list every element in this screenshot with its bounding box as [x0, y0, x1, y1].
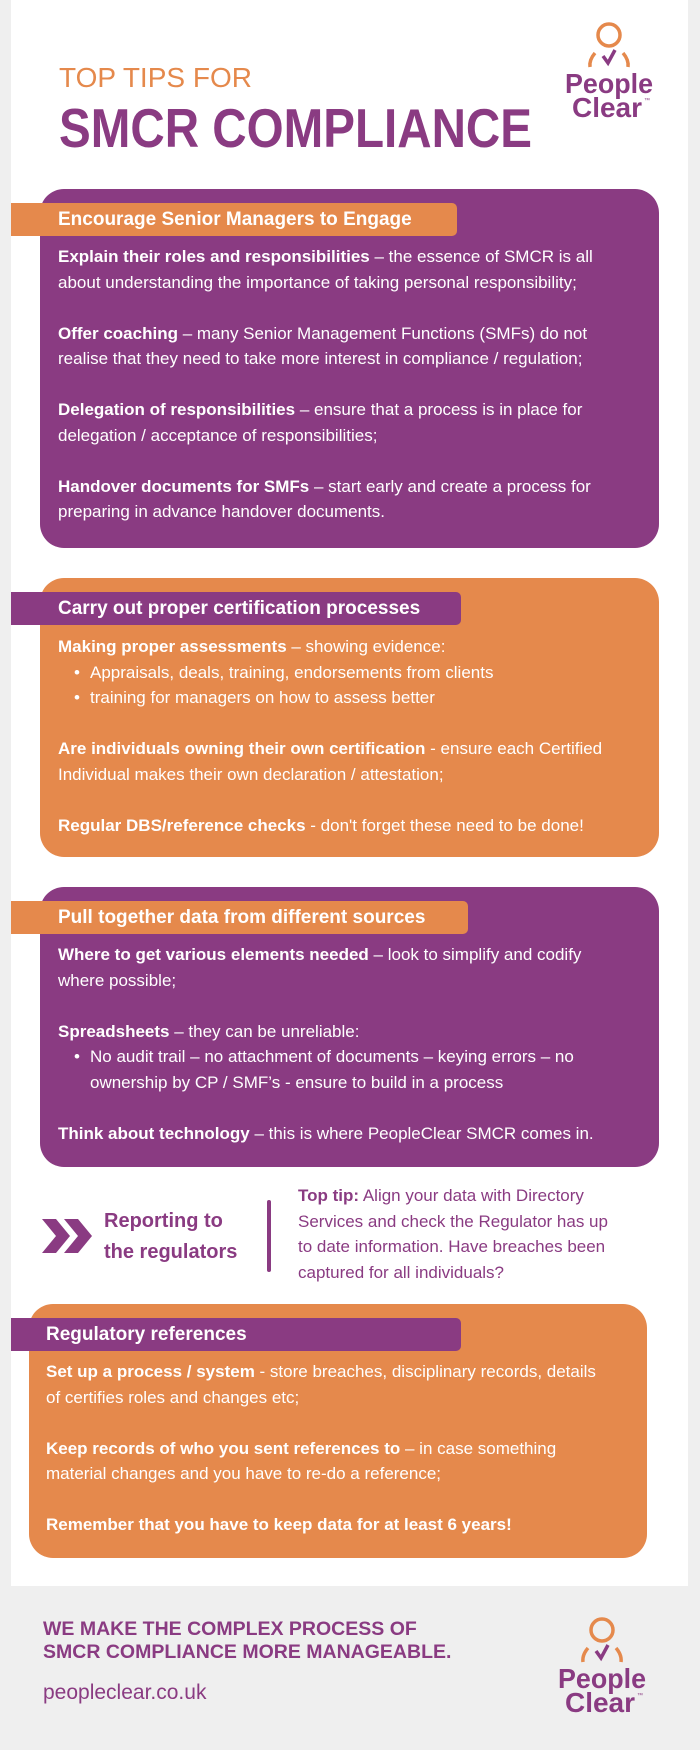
text: panel 1: realise that they need to take more interest in compliance / regulation;: [58, 349, 582, 368]
footer logo: ™: [637, 1692, 643, 1699]
text: panel 3: Spreadsheets – they can be unreliable:: [58, 1022, 359, 1040]
text: panel 1: Offer coaching – many Senior Management Functions (SMFs) do not: [58, 324, 587, 342]
panel: regulatory references: [29, 1304, 647, 1558]
text: panel 3: Think about technology – this is where PeopleClear SMCR comes in.: [58, 1124, 594, 1142]
panel: pull together data: [40, 887, 659, 1167]
callout: top tip: [298, 1186, 608, 1282]
text: panel 1: preparing in advance handover documents.: [58, 502, 385, 521]
heading bar: certification: Carry out proper certification processes: [58, 598, 420, 619]
panel: encourage senior managers: [40, 189, 659, 548]
text: panel 4: Remember that you have to keep data for at least 6 years!: [46, 1515, 512, 1534]
text: panel 2: Are individuals owning their own certification - ensure each Certified: [58, 739, 602, 758]
logo: People Clear: ™: [644, 97, 650, 104]
text: panel 1: Explain their roles and responsibilities – the essence of SMCR is all: [58, 247, 593, 266]
footer logo: People: [558, 1663, 646, 1694]
text: panel 3: ownership by CP / SMF’s - ensure to build in a process: [90, 1072, 503, 1092]
text: panel 1: about understanding the importance of taking personal responsibility;: [58, 272, 577, 292]
text: panel 2: Individual makes their own declaration / attestation;: [58, 764, 444, 784]
text: panel 3: where possible;: [58, 970, 176, 990]
text: panel 4: material changes and you have to re-do a reference;: [46, 1464, 441, 1483]
footer logo: [558, 1617, 646, 1717]
text: panel 4: of certifies roles and changes etc;: [46, 1388, 299, 1406]
text: panel 2: [58, 637, 602, 834]
text: panel 1: Handover documents for SMFs – start early and create a process for: [58, 476, 591, 496]
text: panel 3: [58, 945, 594, 1142]
text: panel 2: training for managers on how to assess better: [90, 688, 435, 707]
heading bar: certification: [11, 592, 461, 625]
heading bar: pull together data: [11, 901, 468, 934]
heading bar: encourage senior managers: [11, 203, 457, 236]
text: panel 1: Delegation of responsibilities – ensure that a process is in place for: [58, 400, 582, 419]
text: panel 2: Making proper assessments – showing evidence:: [58, 637, 445, 656]
footer: tagline: [43, 1618, 451, 1663]
heading bar: regulatory references: [11, 1318, 461, 1351]
icon: double chevron: [42, 1219, 92, 1253]
logo: People Clear: People: [565, 68, 653, 99]
heading bar: regulatory references: Regulatory references: [46, 1324, 247, 1345]
title: top tips for: TOP TIPS FOR: [59, 62, 252, 93]
footer: tagline: WE MAKE THE COMPLEX PROCESS OF: [43, 1618, 417, 1640]
footer: website: peopleclear.co.uk: [43, 1681, 206, 1704]
heading: reporting: [104, 1210, 237, 1263]
text: panel 4: [46, 1362, 596, 1534]
text: panel 1: delegation / acceptance of responsibilities;: [58, 426, 377, 444]
text: panel 1: [58, 247, 593, 521]
callout: top tip: captured for all individuals?: [298, 1262, 504, 1282]
callout: top tip: to date information. Have breaches been: [298, 1237, 605, 1256]
heading: reporting: the regulators: [104, 1241, 237, 1263]
footer: tagline: SMCR COMPLIANCE MORE MANAGEABLE.: [43, 1641, 451, 1663]
callout: top tip: Services and check the Regulator has up: [298, 1212, 608, 1230]
text: panel 3: No audit trail – no attachment of documents – keying errors – no: [90, 1047, 574, 1066]
panel: certification processes: [40, 578, 659, 857]
divider: [267, 1200, 271, 1272]
heading: reporting: Reporting to: [104, 1210, 223, 1232]
callout: top tip: Top tip: Align your data with Directory: [298, 1186, 584, 1205]
heading bar: pull together data: Pull together data from different sources: [58, 907, 425, 928]
logo: People Clear: [565, 22, 653, 122]
text: panel 3: Where to get various elements needed – look to simplify and codify: [58, 945, 581, 964]
heading bar: encourage senior managers: Encourage Senior Managers to Engage: [58, 209, 412, 230]
text: panel 4: Keep records of who you sent references to – in case something: [46, 1438, 556, 1458]
section: reporting to the regulators: [42, 1186, 608, 1282]
text: panel 4: Set up a process / system - store breaches, disciplinary records, details: [46, 1362, 596, 1381]
text: panel 2: Appraisals, deals, training, endorsements from clients: [90, 662, 493, 682]
text: panel 2: Regular DBS/reference checks - don't forget these need to be done!: [58, 816, 584, 834]
